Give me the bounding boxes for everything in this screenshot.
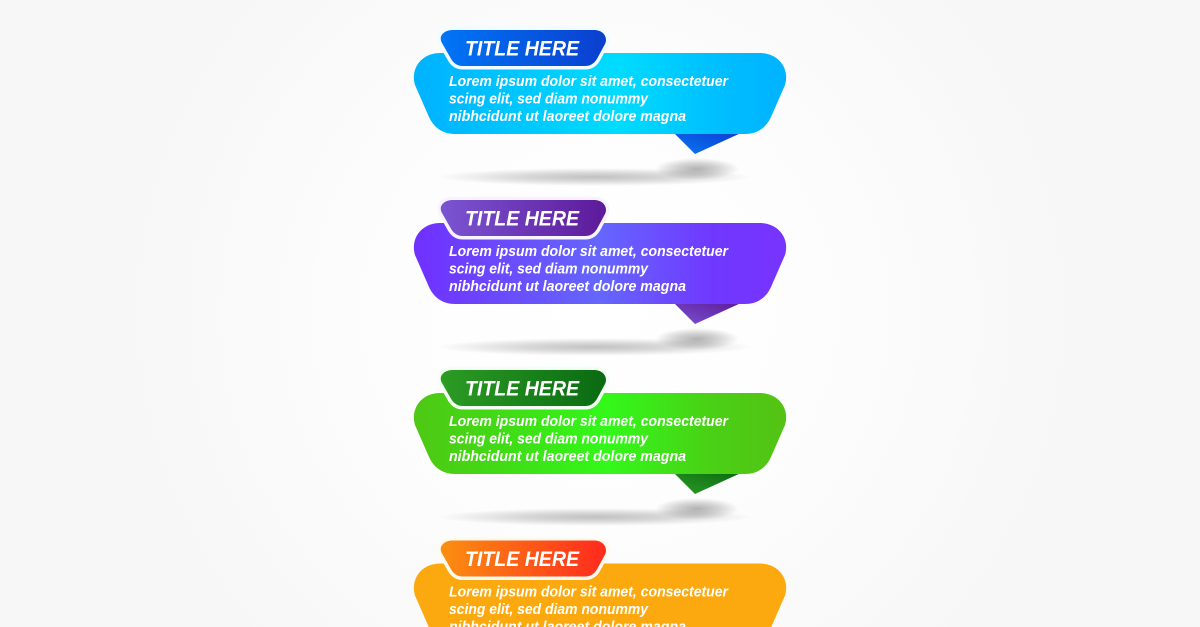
title tab	[441, 370, 606, 406]
body text: scing elit, sed diam nonummy	[449, 430, 649, 448]
banner body	[414, 223, 786, 304]
banner body	[414, 564, 786, 627]
body text	[449, 243, 729, 295]
body text: scing elit, sed diam nonummy	[449, 260, 649, 278]
body text: nibhcidunt ut laoreet dolore magna	[449, 108, 686, 125]
drop shadow	[437, 328, 753, 356]
banner body	[414, 53, 786, 134]
body text: scing elit, sed diam nonummy	[449, 90, 649, 108]
body text	[449, 413, 729, 465]
body text: Lorem ipsum dolor sit amet, consectetuer	[449, 584, 729, 600]
title: TITLE HERE	[465, 548, 580, 571]
panel: blue banner	[414, 30, 786, 186]
body text	[449, 584, 729, 627]
title: TITLE HERE	[465, 208, 580, 230]
pointer	[674, 133, 741, 154]
body text: nibhcidunt ut laoreet dolore magna	[449, 278, 686, 295]
pointer	[674, 473, 741, 494]
body text: nibhcidunt ut laoreet dolore magna	[449, 448, 686, 465]
body text: Lorem ipsum dolor sit amet, consectetuer	[449, 243, 729, 260]
title: TITLE HERE	[465, 38, 580, 60]
panel: purple banner	[414, 200, 786, 356]
title tab	[441, 200, 606, 236]
drop shadow	[437, 158, 753, 186]
body text: scing elit, sed diam nonummy	[449, 601, 649, 618]
banner body	[414, 393, 786, 474]
body text: Lorem ipsum dolor sit amet, consectetuer	[449, 73, 729, 90]
pointer	[674, 303, 741, 324]
title tab	[441, 30, 606, 66]
panel: green banner	[414, 370, 786, 526]
drop shadow	[437, 498, 753, 526]
body text: Lorem ipsum dolor sit amet, consectetuer	[449, 413, 729, 430]
panel: orange banner	[414, 540, 786, 627]
body text	[449, 73, 729, 125]
title tab	[441, 540, 606, 576]
title: TITLE HERE	[465, 378, 580, 400]
